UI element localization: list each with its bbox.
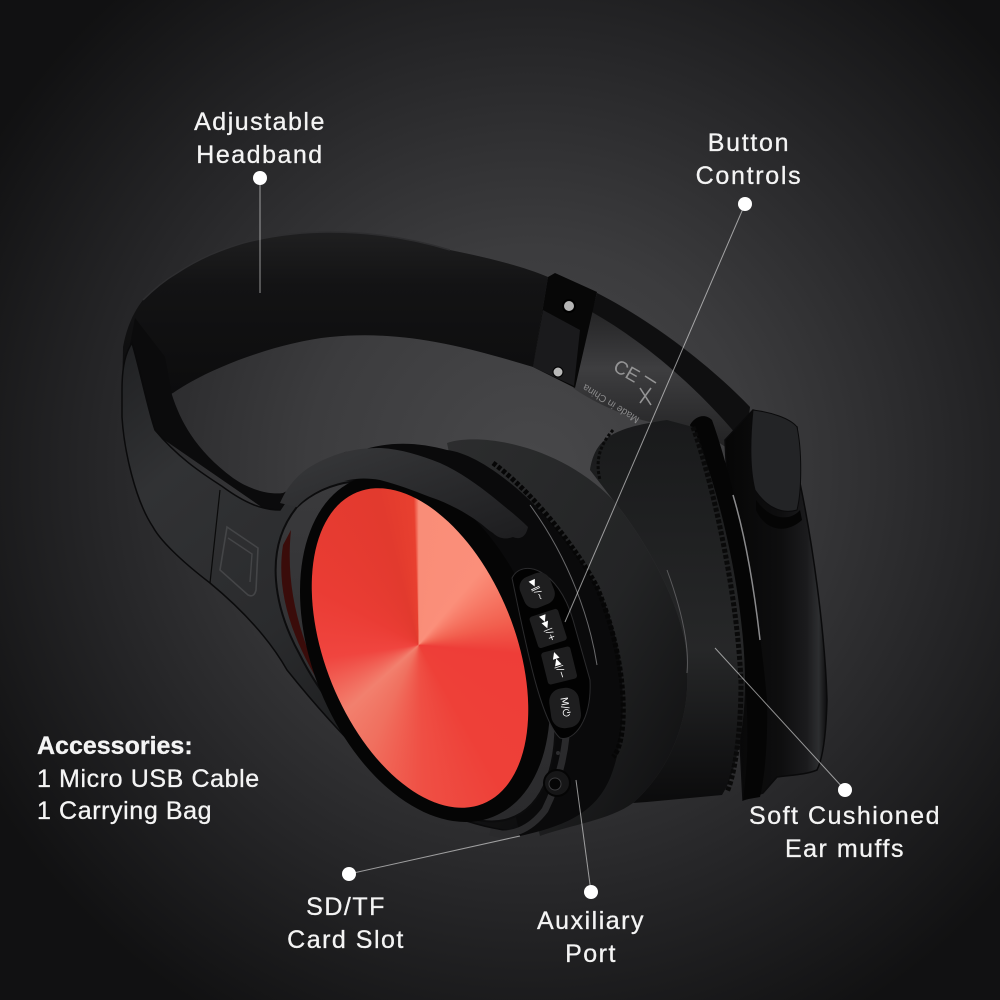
top thick ring part bbox=[280, 448, 528, 538]
label: auxiliary port: Auxiliary bbox=[537, 907, 645, 935]
control buttons: ◀◀|/− bbox=[549, 651, 567, 680]
control buttons bbox=[512, 568, 590, 738]
control buttons: M/⏻ bbox=[557, 696, 572, 718]
auxiliary port bbox=[544, 751, 570, 796]
metal arm bbox=[573, 293, 750, 460]
accessories text block: 1 Carrying Bag bbox=[37, 797, 212, 825]
label: button controls: Controls bbox=[696, 162, 802, 190]
rear ear cushion bbox=[590, 420, 745, 803]
label: adjustable headband: Headband bbox=[196, 140, 324, 168]
label: ear muffs: Ear muffs bbox=[785, 834, 905, 862]
accessories text block bbox=[37, 732, 260, 825]
label: adjustable headband bbox=[194, 108, 326, 168]
control buttons: ▶‖/∼ bbox=[527, 578, 545, 603]
CE marking: CE bbox=[610, 356, 643, 388]
label: card slot: Card Slot bbox=[287, 926, 405, 954]
label: card slot: SD/TF bbox=[306, 893, 386, 921]
label: auxiliary port: Port bbox=[565, 940, 617, 968]
slider mark bbox=[220, 527, 258, 596]
made in china text: Made in China bbox=[581, 381, 642, 425]
label: card slot bbox=[287, 893, 405, 954]
control buttons: ▶▶|/+ bbox=[537, 614, 557, 643]
label: button controls: Button bbox=[708, 129, 790, 157]
label: adjustable headband: Adjustable bbox=[194, 108, 326, 136]
front ear cushion bbox=[447, 439, 687, 836]
label: ear muffs bbox=[749, 802, 941, 862]
label: button controls bbox=[696, 129, 802, 190]
left headband arm and yoke bbox=[122, 343, 520, 832]
rear ear cup bbox=[690, 410, 827, 800]
ear cup face bbox=[330, 444, 623, 836]
slider seam bbox=[210, 490, 220, 583]
disc surround ring bbox=[252, 437, 598, 859]
accessories text block: 1 Micro USB Cable bbox=[37, 764, 260, 792]
accessories text block: Accessories: bbox=[37, 732, 193, 760]
red metal disc bbox=[269, 457, 571, 839]
leader lines bbox=[260, 178, 845, 892]
label: auxiliary port bbox=[536, 907, 645, 968]
hinge bbox=[533, 273, 597, 388]
bin icon bbox=[640, 376, 656, 405]
padded headband bbox=[122, 232, 548, 410]
black arm groove bbox=[130, 318, 420, 515]
label: ear muffs: Soft Cushioned bbox=[749, 802, 941, 830]
marker dots bbox=[253, 171, 852, 899]
